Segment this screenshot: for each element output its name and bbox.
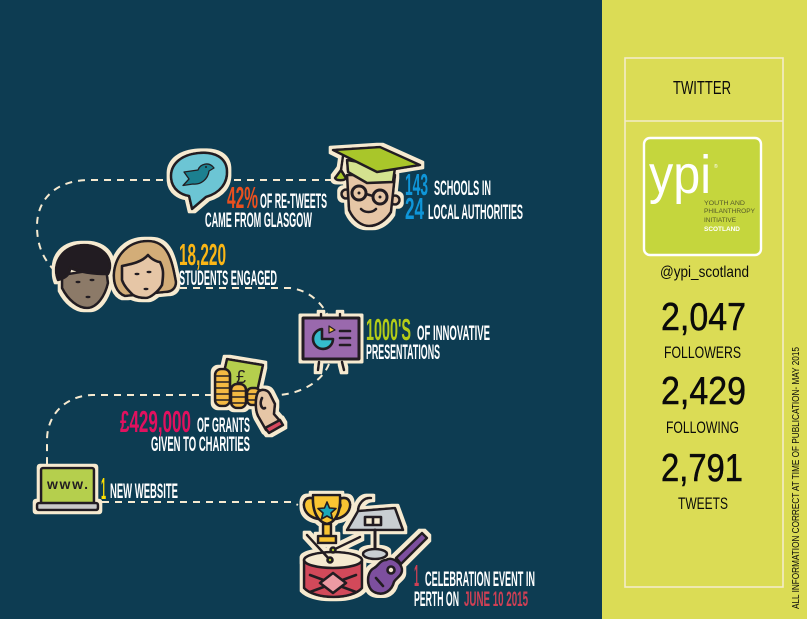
stat: followers (661, 296, 746, 362)
stat: website: 1 (101, 471, 106, 506)
text: CAME FROM GLASGOW (205, 209, 312, 232)
text: twitter handle: @ypi_scotland (660, 264, 749, 281)
stat: presentations: PRESENTATIONS (366, 341, 440, 364)
stat: re-tweets (205, 180, 327, 232)
stat: schools and authorities: 24 (405, 191, 424, 226)
text: NEW WEBSITE (110, 480, 178, 503)
stat: celebration event: 1 (414, 558, 419, 593)
stat: followers: FOLLOWERS (664, 343, 741, 362)
stat: re-tweets: 42% (227, 180, 258, 215)
icon: laptop: www. (46, 476, 88, 492)
stat: tweets (661, 447, 743, 513)
text: LOCAL AUTHORITIES (428, 201, 523, 224)
text: CELEBRATION EVENT IN (425, 568, 535, 591)
stat: celebration event (414, 558, 535, 611)
stat: following (661, 370, 746, 437)
stat: followers: 2,047 (661, 296, 746, 339)
right sidebar background (602, 0, 807, 619)
stat: following: FOLLOWING (666, 418, 739, 437)
stat: tweets: 2,791 (661, 447, 743, 490)
stat: following: 2,429 (661, 370, 746, 413)
dashed journey path (37, 180, 332, 505)
text: OF GRANTS (197, 414, 250, 437)
icon: celebration trophy, music stand, drum and guitar (304, 495, 427, 597)
text: STUDENTS ENGAGED (179, 267, 277, 290)
text: GIVEN TO CHARITIES (151, 433, 250, 456)
icon: coins, banknote and hand (215, 359, 283, 433)
icon: coins, banknote and hand: £ (236, 367, 246, 387)
logo: ypi: PHILANTHROPY (704, 209, 755, 215)
heading: twitter: TWITTER (673, 78, 731, 98)
icon: laptop (37, 468, 98, 510)
stat: grants: £429,000 (120, 404, 191, 439)
logo: ypi: YOUTH AND (704, 201, 746, 207)
stat: presentations: 1000'S (366, 312, 411, 347)
stat: students engaged (179, 237, 277, 290)
icon: speech bubble with bird (171, 153, 227, 209)
text: OF INNOVATIVE (417, 322, 490, 345)
stat: tweets: TWEETS (678, 494, 728, 513)
icon: two students (56, 241, 176, 308)
stat: celebration event: JUNE 10 2015 (464, 588, 528, 611)
stat: presentations (366, 312, 490, 364)
stat: students engaged: 18,220 (179, 237, 226, 272)
stat: schools and authorities (405, 167, 523, 226)
text: OF RE-TWEETS (260, 190, 327, 213)
footnote: publication disclaimer: ALL INFORMATION CORRECT AT TIME OF PUBLICATION- MAY 2015 (791, 347, 802, 609)
stat: website (101, 471, 178, 506)
stat: schools and authorities: SCHOOLS IN (434, 177, 491, 200)
logo: ypi: SCOTLAND (704, 227, 741, 233)
logo: ypi: ypi (649, 145, 711, 205)
icon: graduate head (333, 147, 420, 226)
logo: ypi: INITIATIVE (704, 218, 736, 224)
stat: celebration event: PERTH ON (414, 588, 459, 611)
stat: grants (120, 404, 250, 456)
panel: twitter frame (625, 58, 783, 587)
stat: schools and authorities: 143 (405, 167, 428, 202)
icon: presentation board (303, 314, 359, 370)
logo: ypi: ® (714, 163, 718, 170)
logo: ypi (644, 138, 761, 255)
